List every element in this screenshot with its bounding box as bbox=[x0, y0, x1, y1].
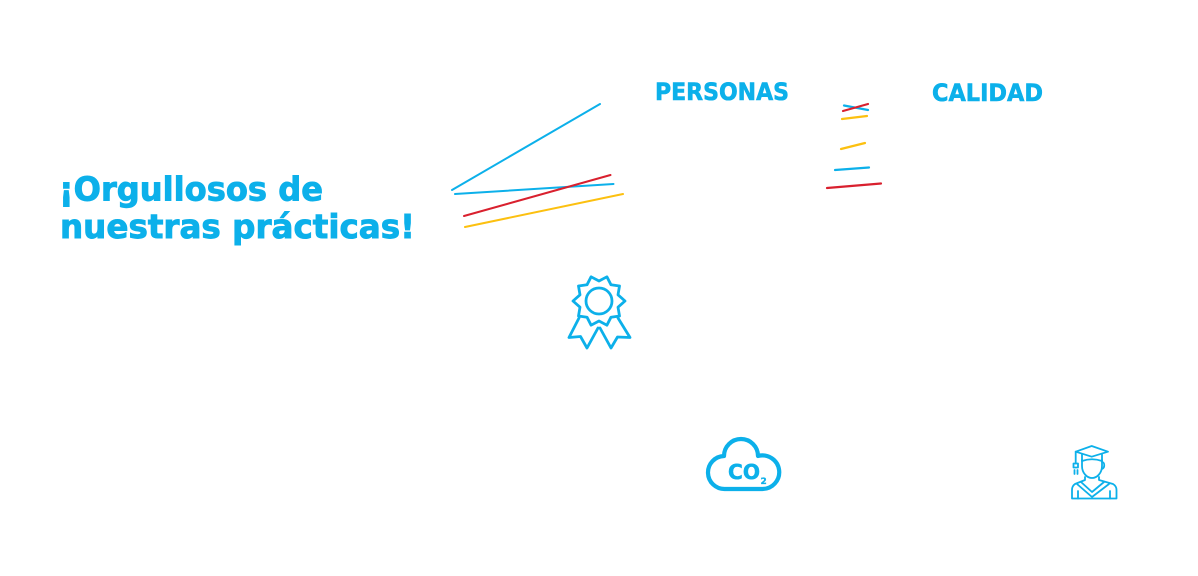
icon: graduate bbox=[1072, 446, 1116, 498]
icon: CO2 cloud bbox=[708, 439, 779, 489]
coloured lines: right group bbox=[827, 104, 881, 188]
heading: calidad: CALIDAD bbox=[932, 79, 1043, 107]
icon: CO2 cloud: 2 bbox=[760, 477, 767, 487]
icon: CO2 cloud: CO bbox=[728, 460, 760, 484]
coloured lines: left group bbox=[452, 104, 623, 227]
heading: personas: PERSONAS bbox=[655, 78, 789, 106]
title bbox=[59, 170, 415, 246]
title: ¡Orgullosos de bbox=[59, 170, 323, 208]
icon: award rosette bbox=[569, 277, 630, 348]
title: nuestras prácticas! bbox=[60, 207, 415, 246]
